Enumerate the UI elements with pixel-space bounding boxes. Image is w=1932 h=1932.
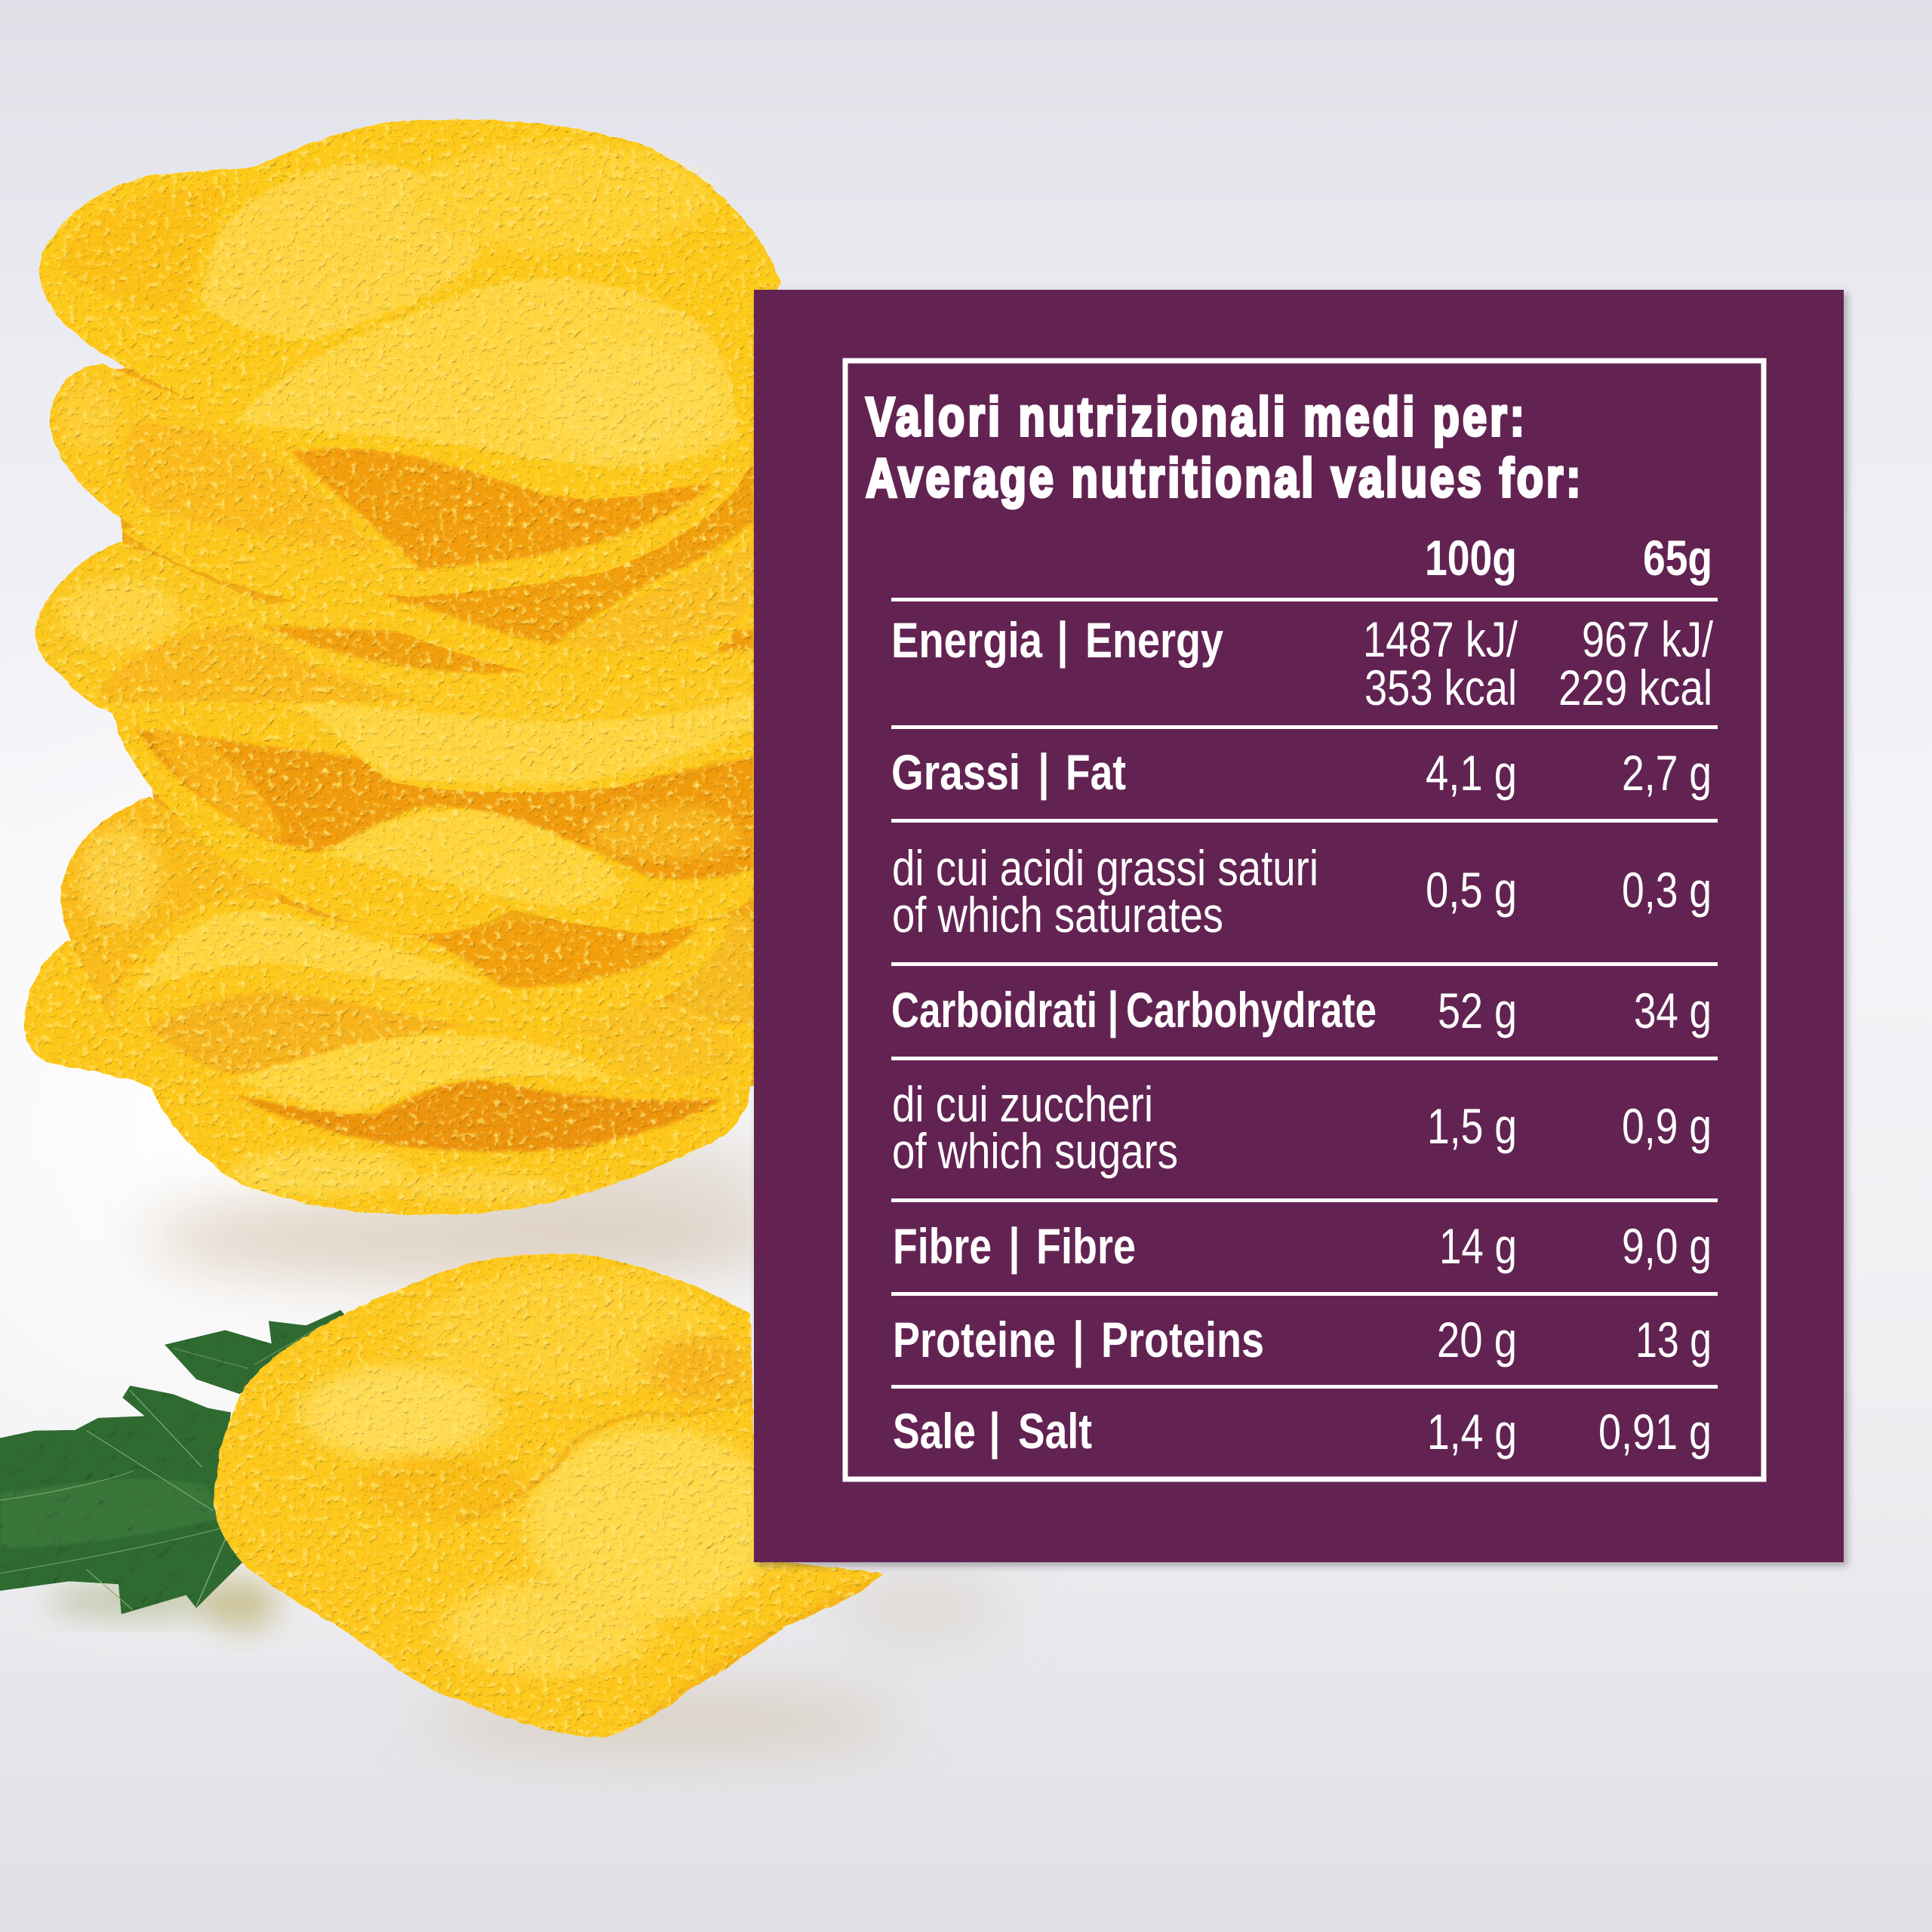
row: energy: 229 kcal (1558, 660, 1712, 715)
row: salt: 0,91 g (1598, 1404, 1712, 1460)
row: proteins: Proteine (893, 1312, 1056, 1367)
stack chip: back left lobe (60, 797, 280, 1033)
row: fibre: | (1008, 1218, 1021, 1274)
row: proteins: | (1072, 1312, 1085, 1367)
row: carbohydrate: 34 g (1634, 983, 1712, 1038)
row: fat (891, 744, 1712, 801)
row: salt: 1,4 g (1427, 1404, 1517, 1460)
row: energy: | (1056, 612, 1069, 668)
row: saturates: of which saturates (892, 887, 1223, 943)
row: saturates: di cui acidi grassi saturi (892, 840, 1318, 896)
row: salt: | (988, 1403, 1001, 1459)
upper half of stack (35, 119, 781, 702)
row: fibre: 14 g (1439, 1218, 1517, 1274)
row: salt: Sale (893, 1403, 976, 1459)
row: sugars: 1,5 g (1427, 1098, 1517, 1154)
row: energy: 967 kJ/ (1582, 611, 1714, 667)
shadow under front chip (45, 1570, 1011, 1751)
panel background (754, 290, 1844, 1562)
stack chip: middle (65, 552, 753, 792)
chip stack (24, 119, 781, 1214)
column headers (1425, 530, 1712, 586)
panel: nutrition facts (754, 290, 1847, 1566)
row: carbohydrate: Carbohydrate (1126, 982, 1377, 1038)
stack chip: middle left lobe (35, 541, 753, 702)
row: fat: Grassi (891, 744, 1020, 800)
row: energy: Energy (1085, 612, 1223, 668)
column headers: 65g (1643, 530, 1712, 586)
stack chip: right lobe (566, 998, 746, 1076)
stack chip: wave upper (115, 898, 728, 1022)
row: proteins: 20 g (1437, 1312, 1517, 1367)
row: carbohydrate: Carboidrati (891, 982, 1097, 1038)
stack chip: bottom bowl (24, 941, 753, 1214)
row: carbohydrate (891, 982, 1712, 1038)
stack chip: far back right (651, 910, 753, 1088)
row: energy: 1487 kJ/ (1363, 611, 1518, 667)
row: proteins: 13 g (1635, 1312, 1712, 1367)
stack chip: wave lower (115, 987, 746, 1115)
lower half of stack (24, 552, 753, 1214)
leaf: lower (0, 1386, 242, 1614)
row: fibre: Fibre (1036, 1218, 1136, 1274)
row: energy (891, 611, 1714, 715)
chip: front (214, 1254, 884, 1738)
heading: Average nutritional values for: (866, 448, 1580, 508)
row: proteins (893, 1312, 1712, 1367)
heading (866, 386, 1580, 508)
stack chip: top (39, 119, 781, 500)
row: saturates: 0,3 g (1622, 862, 1712, 918)
row: salt: Salt (1018, 1403, 1092, 1459)
row: fat: 4,1 g (1426, 745, 1517, 801)
stack underlay (92, 246, 755, 1087)
shadow under chip stack (143, 1132, 792, 1283)
row: fibre: 9,0 g (1622, 1218, 1712, 1274)
row: fat: 2,7 g (1622, 745, 1712, 801)
row: fibre (893, 1218, 1712, 1274)
leaf: upper (165, 1310, 346, 1394)
stack chip: second (50, 364, 753, 596)
column headers: 100g (1425, 530, 1517, 586)
row: sugars (892, 1076, 1712, 1179)
row: energy: Energia (891, 612, 1043, 668)
row: proteins: Proteins (1101, 1312, 1264, 1367)
row: carbohydrate: 52 g (1438, 983, 1517, 1038)
row: fat: | (1037, 744, 1051, 800)
photo: chips and leaf (0, 119, 1011, 1751)
panel frame (845, 361, 1764, 1479)
stack chip: bowl (110, 703, 753, 934)
stack chip: upper rim (120, 445, 753, 683)
row: sugars: di cui zuccheri (892, 1076, 1153, 1132)
row: sugars: 0,9 g (1622, 1098, 1712, 1154)
heading: Valori nutrizionali medi per: (866, 386, 1524, 447)
row rules (891, 598, 1718, 1389)
row: salt (893, 1403, 1712, 1460)
row: saturates (892, 840, 1712, 943)
row: fat: Fat (1066, 744, 1126, 800)
row: saturates: 0,5 g (1426, 862, 1517, 918)
panel shadow (757, 293, 1847, 1566)
row: energy: 353 kcal (1364, 660, 1517, 715)
row: carbohydrate: | (1106, 982, 1120, 1038)
row: sugars: of which sugars (892, 1123, 1178, 1179)
row: fibre: Fibre (893, 1218, 992, 1274)
